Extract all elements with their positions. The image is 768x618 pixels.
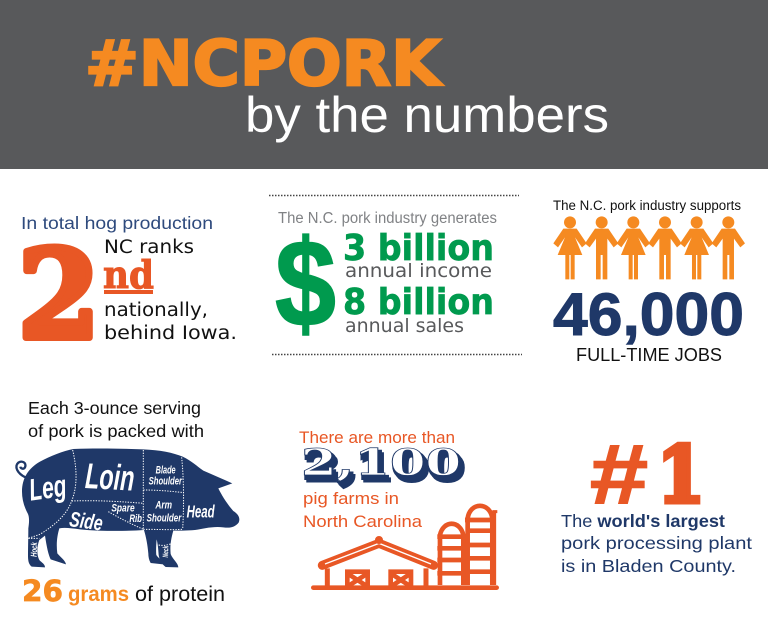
heading: each 3-ounce serving: of pork is packed with (28, 421, 204, 441)
title: #NCPORK: #NCPORK (85, 27, 443, 100)
illustration: pig cut diagram (16, 448, 239, 567)
text: world's largest pork processing plant: is in Bladen County. (561, 556, 736, 576)
text: nationally, behind Iowa. (104, 300, 237, 344)
cut labels: Rib (129, 513, 142, 525)
label: full-time jobs: FULL-TIME JOBS (576, 345, 722, 365)
heading: each 3-ounce serving (28, 398, 204, 441)
cut labels: Leg (27, 469, 69, 508)
stat: 26 grams of protein: 26 (22, 574, 63, 608)
cut labels: Shoulder (147, 512, 182, 524)
stat: #1: # (590, 427, 648, 521)
text: world's largest pork processing plant: The world's largest (561, 511, 725, 531)
heading: industry supports: The N.C. pork industry supports (553, 198, 741, 213)
label: pig farms in North Carolina: pig farms in (303, 489, 399, 508)
panel: pig farms (299, 428, 497, 588)
icon: row of people holding hands (553, 216, 745, 279)
cut labels: Neck (161, 545, 170, 558)
stat: 26 grams of protein: of protein (135, 583, 225, 606)
stat: 46,000: 46,000 (553, 281, 744, 348)
stat: 8 billion: 8 billion (343, 282, 494, 323)
heading: there are more than: There are more than (299, 428, 455, 447)
stat: 3 billion: 3 billion (343, 228, 494, 269)
cut labels: Blade (156, 464, 176, 476)
label: pig farms in North Carolina (303, 489, 423, 531)
stat: 2,100: 2,100 (305, 448, 465, 490)
cut labels: Spare (111, 503, 135, 515)
stat: 26 grams of protein (22, 574, 225, 608)
label: annual income: annual income (345, 260, 492, 282)
heading: in total hog production: In total hog production (21, 213, 213, 233)
ordinal nd: nd (103, 252, 154, 297)
label: annual sales: annual sales (345, 315, 464, 337)
text: world's largest pork processing plant: pork processing plant (561, 533, 752, 553)
cut labels: Side (68, 507, 104, 536)
cut labels: Hock (29, 541, 39, 557)
subtitle: by the numbers: by the numbers (245, 87, 609, 143)
heading: each 3-ounce serving: Each 3-ounce serving (28, 398, 201, 418)
cut labels: Head (187, 501, 215, 521)
big numeral 2: 2 (18, 222, 100, 366)
header banner (0, 0, 768, 169)
text: NC ranks: NC ranks (104, 237, 194, 258)
panel: industry revenue (269, 196, 522, 354)
panel: jobs (553, 198, 745, 365)
panel: largest plant (561, 427, 752, 576)
text: nationally, behind Iowa.: nationally, (104, 300, 208, 321)
stat: #1 (590, 427, 705, 521)
cut lines (28, 450, 184, 545)
stat: 26 grams of protein: grams (68, 583, 129, 606)
panel: protein (16, 398, 239, 608)
icon: barn and silos (313, 506, 497, 588)
heading: industry generates: The N.C. pork industry generates (278, 210, 497, 227)
stat: 2,100: 2,100 (301, 442, 461, 484)
label: pig farms in North Carolina: North Carolina (303, 512, 423, 531)
text: nationally, behind Iowa.: behind Iowa. (104, 323, 237, 344)
stat: #1: 1 (657, 430, 705, 521)
cut labels (27, 455, 215, 558)
cut labels: Shoulder (149, 476, 182, 488)
stat: 2,100 (301, 442, 465, 490)
panel: hog production rank (18, 213, 237, 366)
cut labels: Arm (155, 499, 172, 511)
dollar sign: $ (275, 216, 336, 353)
text: world's largest pork processing plant (561, 511, 752, 576)
cut labels: Loin (84, 455, 136, 499)
stat: 2,100: 2,100 (303, 446, 463, 488)
